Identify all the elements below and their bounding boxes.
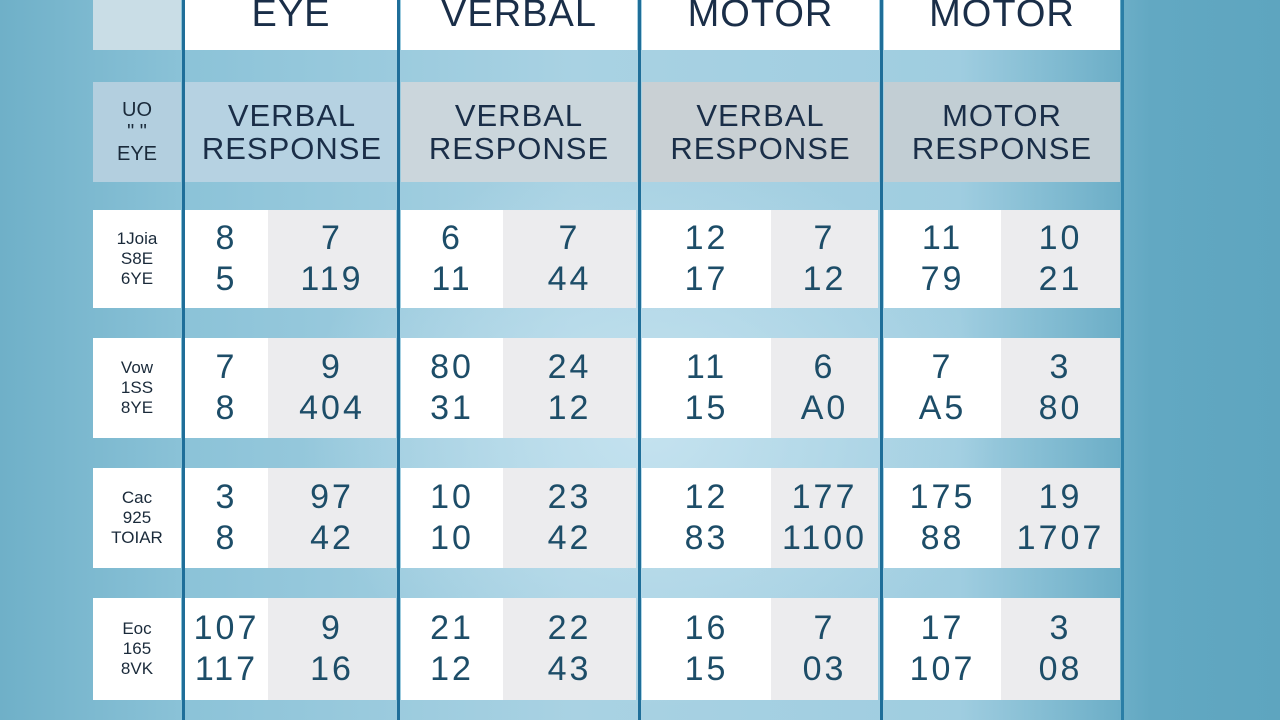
header row: response labels: EYE — [117, 143, 157, 165]
data row 1: 7 — [321, 219, 343, 257]
header row: column titles — [93, 0, 1120, 50]
data row 1: 11 — [922, 219, 963, 257]
data row 1: 17 — [685, 260, 728, 298]
data row 3: 1707 — [1017, 519, 1104, 557]
data row 1: 6 — [441, 219, 463, 257]
data row 1: 7 — [814, 219, 835, 257]
data row 4: 9 — [321, 609, 343, 647]
header row: response labels: MOTOR — [942, 98, 1062, 133]
data row 3: 83 — [685, 519, 728, 557]
data row 4: 107 — [194, 609, 259, 647]
data row 2: 80 — [1039, 389, 1082, 427]
data row 1: 79 — [921, 260, 964, 298]
data row 4: 16 — [310, 650, 354, 688]
data row 4: 117 — [195, 650, 258, 688]
data row 4: 03 — [803, 650, 846, 688]
data row 3: 23 — [548, 478, 591, 516]
data row 4: 21 — [430, 609, 474, 647]
data row 2: 9 — [321, 348, 343, 386]
data row 1: 44 — [548, 260, 591, 298]
data row 2: 11 — [686, 348, 727, 386]
data row 3: TOIAR — [111, 528, 163, 547]
data row 4: 7 — [814, 609, 835, 647]
data row 4: 43 — [548, 650, 591, 688]
data row 3: 12 — [685, 478, 728, 516]
data row 1: 6YE — [121, 269, 153, 288]
data row 4: 8VK — [121, 659, 153, 678]
header row: response labels: " " — [127, 121, 147, 143]
data row 1 — [93, 210, 1120, 308]
data row 4: 3 — [1050, 609, 1071, 647]
data row 1: 11 — [431, 260, 473, 298]
data row 4: 22 — [548, 609, 591, 647]
data row 3: 88 — [921, 519, 964, 557]
data row 3: 177 — [792, 478, 857, 516]
header row: response labels: VERBAL — [696, 98, 825, 133]
data row 2: A5 — [919, 389, 966, 427]
header row: response labels: RESPONSE — [912, 131, 1092, 166]
data row 3: 925 — [123, 508, 151, 527]
data row 2: Vow — [121, 358, 153, 377]
data row 3: 175 — [910, 478, 975, 516]
data row 1: S8E — [121, 249, 153, 268]
data row 3: Cac — [122, 488, 152, 507]
background glow — [300, 150, 1000, 710]
data row 1: 7 — [559, 219, 580, 257]
data row 3: 10 — [430, 519, 474, 557]
header row: response labels: UO — [122, 99, 152, 121]
header row: response labels: RESPONSE — [202, 131, 382, 166]
data row 2: 12 — [548, 389, 591, 427]
header row: response labels: VERBAL — [228, 98, 356, 133]
data row 3: 97 — [310, 478, 354, 516]
data row 1: 119 — [300, 260, 364, 298]
data row 3: 19 — [1039, 478, 1082, 516]
data row 2: A0 — [801, 389, 848, 427]
data row 2: 1SS — [121, 378, 153, 397]
data row 2: 7 — [216, 348, 237, 386]
data row 2: 31 — [430, 389, 474, 427]
data row 4: 165 — [123, 639, 151, 658]
header row: response labels: RESPONSE — [670, 131, 851, 166]
data row 1: 12 — [685, 219, 728, 257]
data row 4: 12 — [430, 650, 474, 688]
data row 4 — [93, 598, 1120, 700]
data row 4: 16 — [685, 609, 728, 647]
data row 2 — [93, 338, 1120, 438]
data row 4: 17 — [921, 609, 964, 647]
data row 2: 3 — [1050, 348, 1071, 386]
data row 2: 15 — [685, 389, 728, 427]
data row 2: 404 — [299, 389, 365, 427]
data row 1: 8 — [216, 219, 237, 257]
data row 1: 1Joia — [117, 229, 157, 248]
data row 2: 24 — [548, 348, 591, 386]
data row 3: 3 — [216, 478, 237, 516]
data row 1: 5 — [216, 260, 237, 298]
header row: response labels — [93, 82, 1120, 182]
data row 3: 8 — [216, 519, 237, 557]
header row: response labels: RESPONSE — [429, 131, 609, 166]
data row 1: 21 — [1039, 260, 1082, 298]
data row 2: 8 — [216, 389, 237, 427]
data row 3: 42 — [548, 519, 591, 557]
header row: response labels: VERBAL — [455, 98, 583, 133]
data row 3 — [93, 468, 1120, 568]
data row 2: 80 — [430, 348, 474, 386]
data row 2: 7 — [932, 348, 953, 386]
data row 4: Eoc — [122, 619, 152, 638]
data row 1: 12 — [803, 260, 846, 298]
data row 3: 10 — [430, 478, 474, 516]
data row 2: 8YE — [121, 398, 153, 417]
data row 2: 6 — [814, 348, 835, 386]
data row 1: 10 — [1039, 219, 1082, 257]
data row 4: 107 — [910, 650, 975, 688]
data row 4: 15 — [685, 650, 728, 688]
data row 4: 08 — [1039, 650, 1082, 688]
data row 3: 1100 — [782, 519, 867, 557]
data row 3: 42 — [310, 519, 354, 557]
